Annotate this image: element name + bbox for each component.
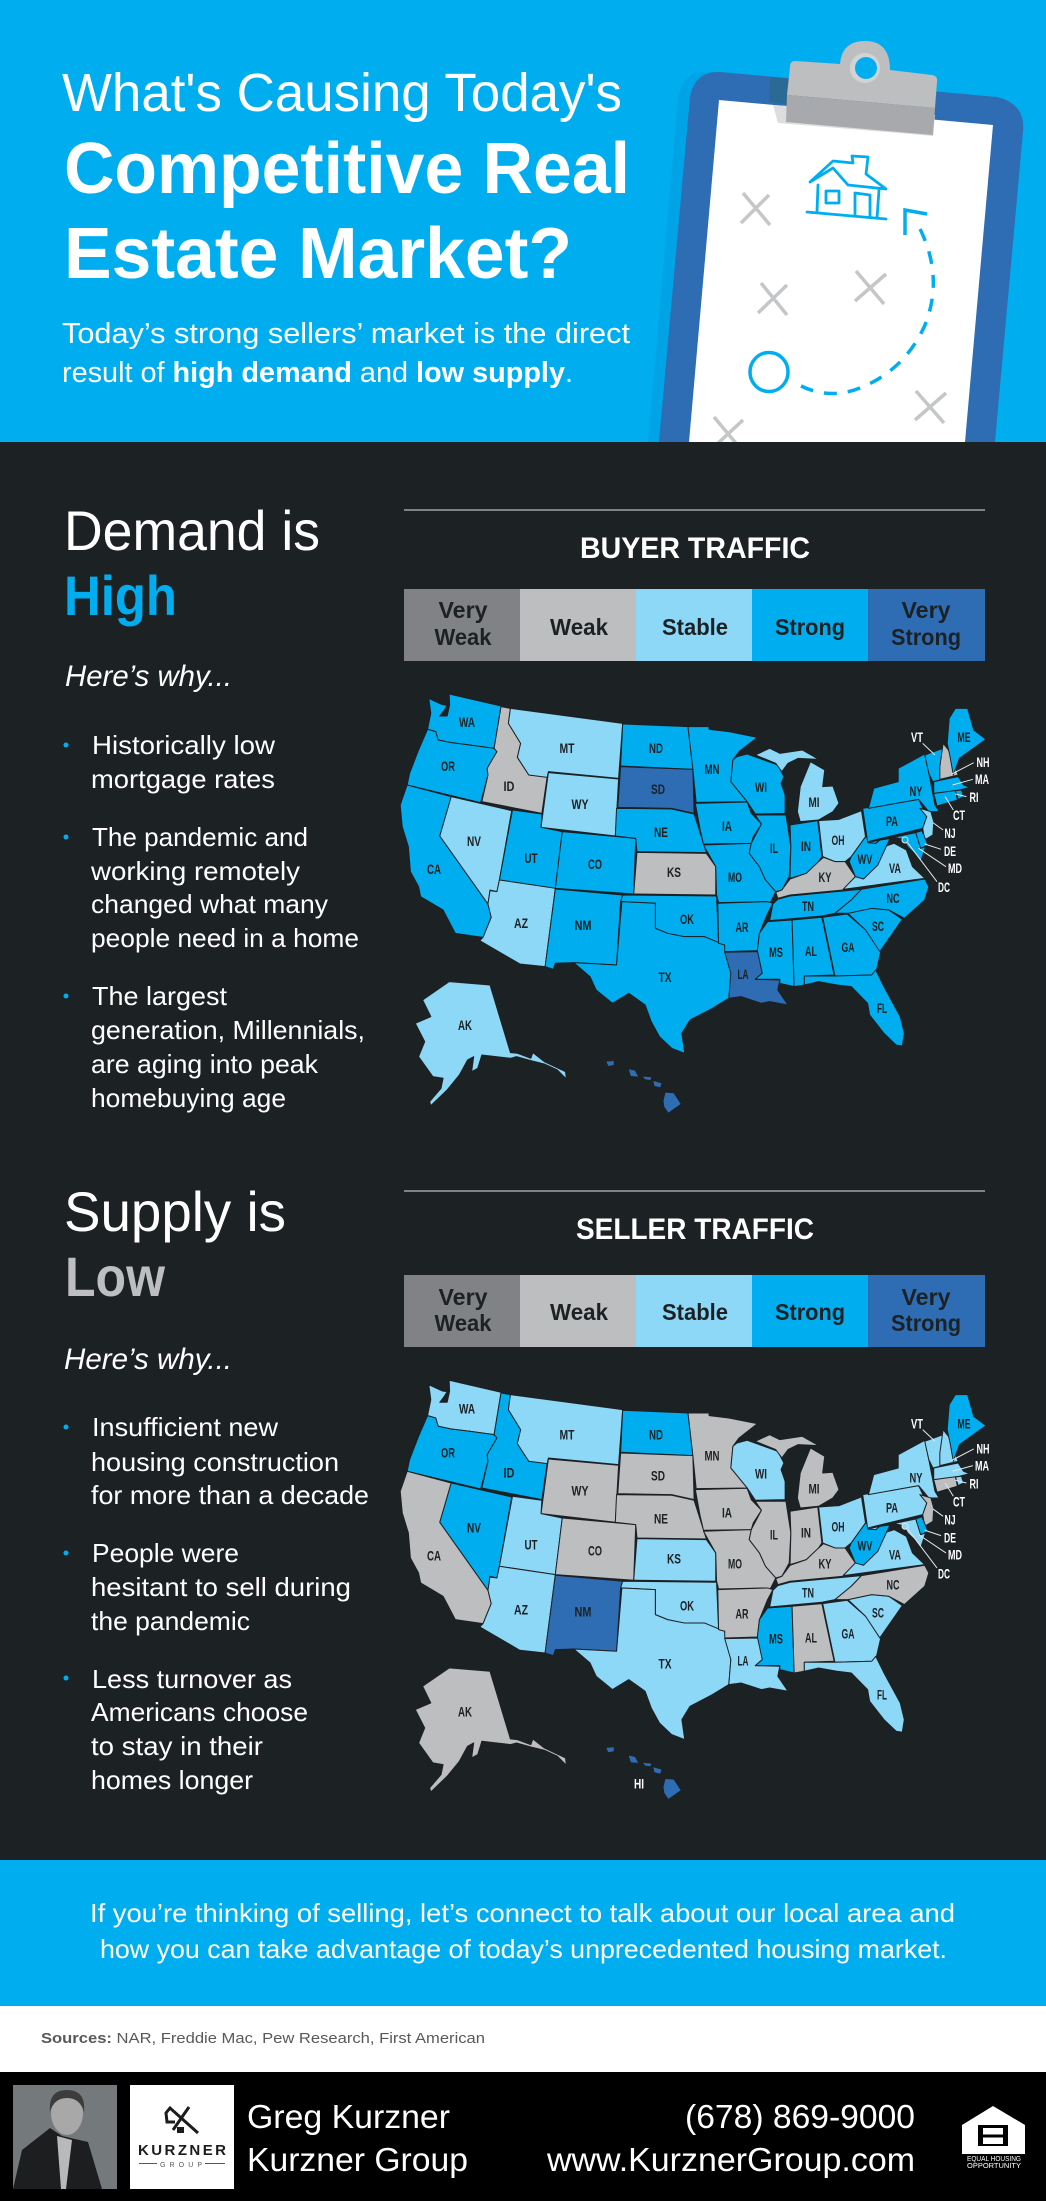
bullet list: supply: for more than a decade [91,1480,369,1510]
bullet list: demand: homebuying age [91,1083,286,1113]
map: buyer traffic: AK [458,1017,472,1033]
map: seller traffic: WI [755,1465,767,1481]
legend: buyer traffic: Very [438,597,488,623]
heading: demand is high: Demand is [64,499,320,562]
map: buyer traffic: DE [944,843,956,859]
photo: agent portrait [13,2085,117,2189]
map: buyer traffic: MA [975,771,989,787]
subtitle [62,318,630,389]
map: buyer traffic: UT [524,850,538,866]
map: seller traffic: MD [948,1546,962,1562]
map: seller traffic: CT [953,1493,965,1509]
bullet list: demand: mortgage rates [91,764,275,794]
bullet list: supply: Americans choose [91,1697,308,1727]
map: buyer traffic: OK [680,911,694,927]
map: seller traffic: WY [572,1482,589,1498]
agent name: Kurzner Group [247,2141,468,2178]
map: seller traffic: MI [808,1480,820,1496]
legend: buyer traffic: Weak [434,624,492,650]
map: buyer traffic: AR [736,919,748,935]
map: seller traffic: GA [842,1625,854,1641]
map: seller traffic: NV [467,1519,481,1535]
contact details: www.KurznerGroup.com [546,2141,915,2178]
map: seller traffic: ND [649,1426,663,1442]
bullet list: demand: changed what many [91,889,328,919]
subheading: Here’s why... [64,1343,232,1376]
map: seller traffic: WV [858,1537,873,1553]
map: buyer traffic: SD [651,781,665,797]
map: seller traffic: RI [970,1475,978,1491]
map: seller traffic: ID [504,1464,514,1480]
bullet list: supply: hesitant to sell during [91,1572,351,1602]
title [62,63,630,294]
bullet list: supply: People were [92,1538,239,1568]
icon: equal housing opportunity: OPPORTUNITY [967,2163,1021,2170]
map: buyer traffic: PA [886,813,898,829]
map: seller traffic: CO [588,1542,602,1558]
bullet list: demand: generation, Millennials, [91,1015,365,1045]
heading: supply is low: Low [65,1245,165,1308]
map: buyer traffic: ME [958,729,970,745]
map: seller traffic: IN [801,1524,811,1540]
map: buyer traffic: LA [738,966,748,982]
map: seller traffic: PA [886,1499,898,1515]
bullet list: demand: Historically low [92,730,275,760]
icon: equal housing opportunity [962,2106,1025,2170]
legend: seller traffic: Very [438,1284,488,1310]
map: seller traffic: MN [704,1447,720,1463]
map: buyer traffic: IN [801,838,811,854]
map: seller traffic: NY [910,1469,923,1485]
map: buyer traffic: MI [808,794,820,810]
title: Estate Market? [64,214,572,294]
map: seller traffic: NH [976,1440,990,1456]
map: seller traffic: IA [722,1504,732,1520]
map: seller traffic [400,1380,990,1799]
map: seller traffic: AZ [514,1601,528,1617]
map: seller traffic: NE [654,1510,668,1526]
legend: seller traffic [404,1275,985,1347]
map: buyer traffic: WY [572,796,589,812]
map: buyer traffic: TX [658,969,672,985]
agent name [247,2098,468,2178]
map: seller traffic: FL [877,1686,887,1702]
bullet list: supply: homes longer [91,1765,253,1795]
bullet list: supply: Insufficient new [92,1412,278,1442]
map: buyer traffic: FL [877,1000,887,1016]
panel: buyer traffic [400,509,990,1113]
panel: footer [0,2072,1046,2201]
bullet list: supply: to stay in their [91,1731,263,1761]
map: seller traffic: SC [872,1604,884,1620]
legend: buyer traffic: Very [902,597,951,623]
panel: header [0,0,1046,448]
map: seller traffic: IL [770,1526,778,1542]
map: seller traffic: SD [651,1467,665,1483]
map: seller traffic: AK [458,1703,472,1719]
panel: call to action [0,1860,1046,2006]
map: buyer traffic: NE [654,824,668,840]
map: buyer traffic: CT [953,807,965,823]
map: seller traffic: WA [459,1400,475,1416]
legend: buyer traffic [404,589,985,661]
map: seller traffic: LA [738,1652,748,1668]
map: seller traffic: OK [680,1597,694,1613]
map: buyer traffic: IA [722,818,732,834]
map: seller traffic: ME [958,1415,970,1431]
legend: seller traffic: Strong [891,1310,961,1336]
map: buyer traffic: NJ [944,825,956,841]
map: buyer traffic: KY [818,869,832,885]
map: buyer traffic [400,694,990,1113]
icon: equal housing opportunity: EQUAL HOUSING [967,2156,1021,2163]
bullet list: supply: the pandemic [91,1606,250,1636]
map: seller traffic: OR [441,1444,455,1460]
logo: Kurzner Group [130,2085,234,2189]
icon: dashed route and arrow [750,210,933,394]
map: seller traffic: DE [944,1529,956,1545]
agent name: Greg Kurzner [247,2098,450,2135]
title: What's Causing Today's [62,63,622,123]
map: buyer traffic: MN [704,761,720,777]
map: buyer traffic: DC [938,879,950,895]
map: buyer traffic: NY [910,783,923,799]
clip [769,41,937,136]
legend: buyer traffic: Stable [662,614,728,640]
map: seller traffic: VT [911,1415,923,1431]
map: seller traffic: NJ [944,1511,956,1527]
legend: seller traffic: Very [902,1284,951,1310]
map: seller traffic: TX [658,1655,672,1671]
map: buyer traffic: OR [441,758,455,774]
map: seller traffic: DC [938,1565,950,1581]
bullet list: supply: housing construction [91,1447,339,1477]
map: buyer traffic: WI [755,779,767,795]
legend: buyer traffic: Strong [891,624,961,650]
map: buyer traffic: MD [948,860,962,876]
map: buyer traffic: NC [886,890,900,906]
legend: seller traffic: Strong [775,1299,845,1325]
map: buyer traffic: MT [560,740,575,756]
panel: seller traffic [400,1190,990,1799]
heading: buyer traffic: BUYER TRAFFIC [580,532,810,565]
panel: supply text [64,1180,369,1795]
map: buyer traffic: KS [667,864,681,880]
map: buyer traffic: ID [504,778,514,794]
bullet list: demand: The largest [92,981,228,1011]
map: seller traffic: HI [634,1775,644,1791]
subtitle: Today’s strong sellers’ market is the direct [62,318,630,350]
map: buyer traffic: OH [832,832,844,848]
map: seller traffic: VA [889,1546,901,1562]
map: buyer traffic: SC [872,918,884,934]
map: seller traffic: OH [832,1518,844,1534]
map: seller traffic: MA [975,1457,989,1473]
icon: house [807,156,886,219]
bullet list: supply: Less turnover as [92,1664,292,1694]
map: buyer traffic: CA [427,861,441,877]
logo: Kurzner Group: GROUP [160,2162,202,2169]
heading: seller traffic: SELLER TRAFFIC [576,1213,814,1246]
panel: call to action: If you’re thinking of selling, let’s connect to talk about our local area and [90,1898,955,1928]
title: Competitive Real [64,129,630,209]
heading: supply is low: Supply is [64,1180,286,1243]
heading: demand is high: High [64,564,177,627]
legend: buyer traffic: Weak [550,614,608,640]
map: seller traffic: MT [560,1426,575,1442]
legend: seller traffic: Stable [662,1299,728,1325]
map: buyer traffic: MO [728,869,742,885]
icon: play diagram marks [714,193,946,448]
map: seller traffic: KS [667,1550,681,1566]
map: buyer traffic: RI [970,789,978,805]
map: seller traffic: MO [728,1555,742,1571]
map: buyer traffic: VA [889,860,901,876]
bullet list: demand: working remotely [90,856,300,886]
panel: call to action: how you can take advantage of today’s unprecedented housing market. [100,1934,947,1964]
map: seller traffic: NM [574,1603,592,1619]
bullet list: supply [64,1412,369,1795]
subheading: Here’s why... [65,660,232,693]
icon: clipboard [648,41,1023,448]
logo: Kurzner Group: KURZNER [138,2142,226,2159]
bullet list: demand: The pandemic and [92,822,308,852]
contact details [546,2098,915,2178]
map: buyer traffic: GA [842,939,854,955]
heading: demand is high [64,499,320,627]
legend: seller traffic: Weak [434,1310,492,1336]
map: buyer traffic: IL [770,840,778,856]
bullet list: demand: are aging into peak [91,1049,319,1079]
map: buyer traffic: AZ [514,915,528,931]
map: buyer traffic: ND [649,740,663,756]
map: buyer traffic: CO [588,856,602,872]
map: buyer traffic: NV [467,833,481,849]
contact details: (678) 869-9000 [685,2098,915,2135]
map: buyer traffic: TN [802,898,814,914]
bullet list: demand [64,730,365,1113]
legend: seller traffic: Weak [550,1299,608,1325]
subtitle: result of high demand and low supply. [62,357,573,389]
map: buyer traffic: NM [574,917,592,933]
map: seller traffic: CA [427,1547,441,1563]
map: buyer traffic: WV [858,851,873,867]
panel: sources [0,2006,1046,2072]
map: seller traffic: KY [818,1555,832,1571]
panel: sources: Sources: NAR, Freddie Mac, Pew Research, First American [41,2030,485,2047]
heading: supply is low [64,1180,286,1308]
map: buyer traffic: NH [976,754,990,770]
map: seller traffic: TN [802,1584,814,1600]
map: seller traffic: AR [736,1605,748,1621]
map: buyer traffic: WA [459,714,475,730]
panel: demand text [64,499,365,1113]
map: buyer traffic: VT [911,729,923,745]
map: seller traffic: UT [524,1536,538,1552]
map: seller traffic: MS [769,1630,783,1646]
map: buyer traffic: MS [769,944,783,960]
legend: buyer traffic: Strong [775,614,845,640]
bullet list: demand: people need in a home [91,923,359,953]
map: seller traffic: NC [886,1576,900,1592]
map: seller traffic: AL [805,1629,817,1645]
map: buyer traffic: AL [805,943,817,959]
